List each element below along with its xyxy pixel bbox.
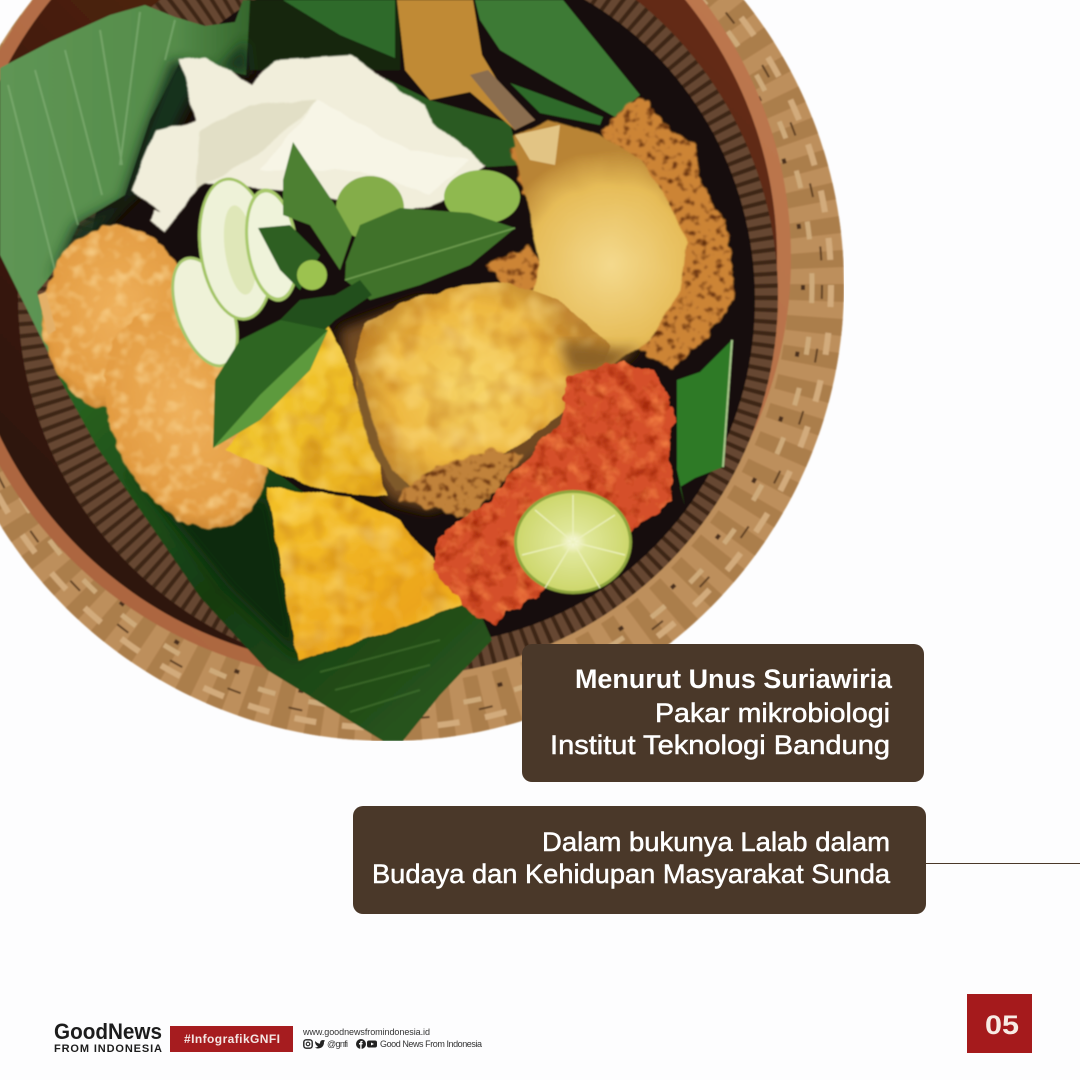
footer channel name: Good News From Indonesia: [380, 1039, 482, 1049]
photo: ayam goreng platter on woven tray: [0, 0, 844, 741]
callout: source expert: Pakar mikrobiologi: [655, 698, 890, 728]
footer logo: GoodNews From Indonesia: FROM INDONESIA: [54, 1043, 162, 1055]
icon: instagram: [304, 1040, 312, 1048]
crispy crumbs left: [484, 243, 540, 291]
woven bamboo tray: [0, 0, 844, 741]
banana leaf: behind cabbage: [385, 78, 520, 167]
petai bean right: [444, 170, 520, 224]
cucumber slice lower: [170, 255, 240, 368]
callout: book reference: [353, 806, 926, 914]
basil leaf small: [258, 225, 320, 290]
basil leaf lower: [213, 320, 328, 448]
tofu triangle lower: [267, 487, 470, 660]
inner rim shadow: [0, 0, 777, 667]
footer logo: GoodNews From Indonesia: GoodNews: [54, 1019, 162, 1044]
tempeh round front: [103, 312, 270, 532]
cabbage: [130, 55, 485, 232]
icon: facebook: [356, 1039, 366, 1049]
callout: source expert: Menurut Unus Suriawiria: [575, 664, 893, 694]
petai bean left: [336, 176, 404, 240]
banana leaf: top-right: [475, 0, 640, 117]
icon: twitter: [315, 1040, 325, 1048]
cucumber slice right: [244, 188, 298, 303]
tofu triangle upper: [225, 325, 388, 497]
banana leaf: top-center green: [283, 0, 395, 58]
callout: book reference: Budaya dan Kehidupan Masyarakat Sunda: [372, 859, 891, 889]
crumbs below chicken: [398, 450, 525, 522]
banana leaf: top-center dark fold: [243, 0, 400, 70]
dark bowl interior: [85, 0, 755, 645]
basil leaf dark: [279, 280, 372, 331]
banana leaf: lower dark: [55, 340, 492, 741]
icon: youtube: [367, 1040, 377, 1048]
banana leaf: large light green: [0, 0, 250, 380]
basil leaf top: [283, 142, 352, 270]
tempeh small piece: [38, 292, 56, 335]
basil flower: [297, 260, 327, 290]
footer handle: @gnfi: [327, 1039, 348, 1049]
hashtag badge: #InfografikGNFI: [184, 1032, 280, 1046]
basil leaf big: [345, 208, 515, 300]
callout: source expert: Institut Teknologi Bandung: [550, 730, 890, 760]
footer logo: GoodNews From Indonesia: [54, 1019, 162, 1055]
callout: source expert: [522, 644, 924, 782]
sambal: [433, 363, 673, 623]
callout: book reference: Dalam bukunya Lalab dalam: [542, 827, 890, 857]
footer website: www.goodnewsfromindonesia.id: [302, 1027, 430, 1037]
hashtag badge: [170, 1026, 293, 1052]
chicken underside fill: [332, 292, 564, 517]
crispy crumbs right: [600, 95, 735, 368]
cucumber slice upper: [196, 176, 269, 322]
fried chicken bone end: [397, 0, 535, 130]
tempeh round back: [42, 226, 190, 410]
terracotta wooden bowl rim: [0, 0, 791, 681]
banana leaf: small right: [677, 340, 732, 507]
banana leaf: top-right under: [510, 83, 603, 125]
lime slice: [514, 490, 632, 594]
page number badge: [967, 994, 1032, 1053]
crispy crumbs upper: [508, 146, 526, 196]
page number badge: 05: [985, 1010, 1019, 1040]
fried chicken: [355, 120, 687, 490]
carved wooden bowl: [18, 0, 778, 676]
